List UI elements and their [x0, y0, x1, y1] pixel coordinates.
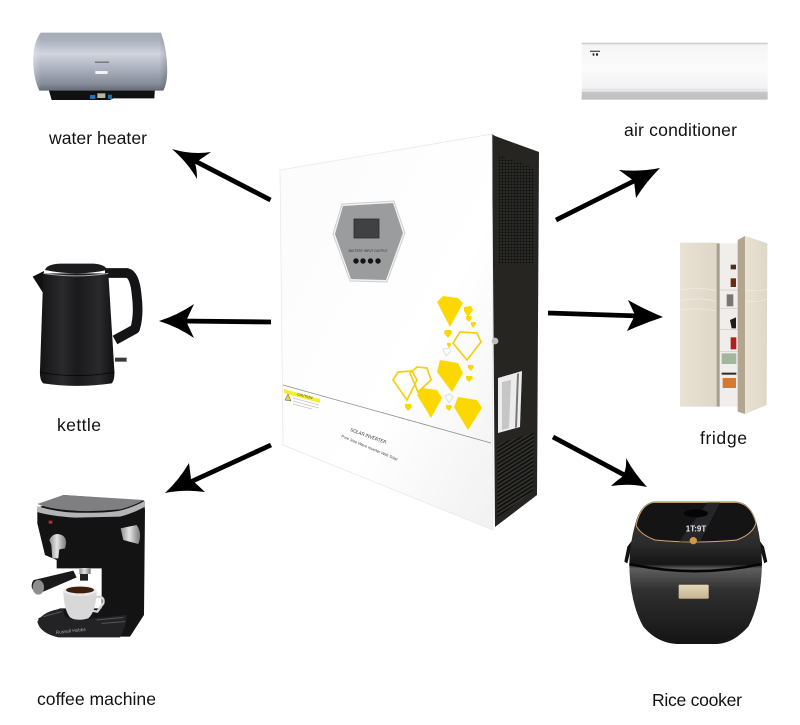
- label: air conditioner: air conditioner: [624, 120, 737, 140]
- label: water heater: water heater: [48, 128, 147, 148]
- cooker body: [629, 502, 762, 644]
- power light: [49, 521, 52, 524]
- brand text: Russell Hobbs: [56, 627, 87, 635]
- LCD screen: [354, 219, 379, 238]
- kettle body: [40, 273, 114, 386]
- inverter product subtitle: Pure Sine Wave Inverter With Solar: [341, 433, 399, 462]
- arrow: to air conditioner: [556, 168, 660, 220]
- gold button: [690, 537, 697, 544]
- side screw: [492, 338, 498, 344]
- side vent bottom: [497, 433, 534, 518]
- kettle handle: [105, 273, 138, 340]
- inverter side panel: [492, 134, 539, 527]
- selector knob: [49, 534, 66, 558]
- appliance: water heater: [33, 33, 167, 100]
- lid glare: [679, 503, 720, 542]
- yellow diamonds: [393, 296, 482, 430]
- kettle lid: [45, 264, 107, 273]
- display: 1T:9T: [686, 524, 706, 533]
- lid seam: [629, 564, 762, 571]
- kettle spout: [33, 271, 44, 293]
- label: fridge: fridge: [700, 428, 747, 448]
- kettle base switch: [115, 358, 127, 362]
- inverter: [280, 134, 539, 530]
- side handles: [624, 537, 636, 563]
- fridge interior: [717, 243, 738, 407]
- arrow: to kettle: [159, 304, 271, 338]
- side rating label: [498, 371, 522, 433]
- left door: [680, 243, 717, 407]
- appliance: fridge: [680, 236, 767, 414]
- control panel: [333, 201, 405, 282]
- top steel plate: [37, 495, 144, 511]
- machine body: [37, 495, 145, 637]
- label: kettle: kettle: [57, 415, 101, 435]
- shelves and food: [720, 265, 738, 388]
- appliance: air conditioner: [582, 43, 768, 100]
- steam knob: [121, 525, 140, 544]
- drip tray: [37, 608, 127, 637]
- appliance: coffee machine: [32, 495, 145, 637]
- label: rice cooker: Rice cooker: [652, 690, 742, 710]
- side vent top: [499, 155, 534, 265]
- arrow: to water heater: [172, 149, 270, 200]
- caution sticker: CAUTION: [297, 392, 313, 400]
- inverter product name: SOLAR INVERTER: [349, 427, 388, 446]
- appliance: kettle: [33, 264, 138, 386]
- control top: [636, 502, 756, 542]
- coffee cup: [63, 586, 104, 620]
- indicator labels: BATTERY INPUT OUTPUT: [349, 249, 387, 253]
- front panel: [280, 134, 493, 530]
- arrow: to fridge: [548, 300, 663, 331]
- steam vent: [684, 509, 708, 517]
- caution sticker: [284, 389, 320, 409]
- control buttons: [353, 258, 381, 264]
- arrow: to rice cooker: [553, 437, 647, 487]
- appliance: rice cooker: [624, 502, 767, 644]
- label: coffee machine: coffee machine: [37, 689, 156, 709]
- front panel seam: [283, 385, 491, 443]
- portafilter: [32, 571, 77, 593]
- arrow: to coffee machine: [165, 445, 271, 493]
- open right door: [738, 236, 745, 414]
- gold latch plate: [679, 585, 709, 599]
